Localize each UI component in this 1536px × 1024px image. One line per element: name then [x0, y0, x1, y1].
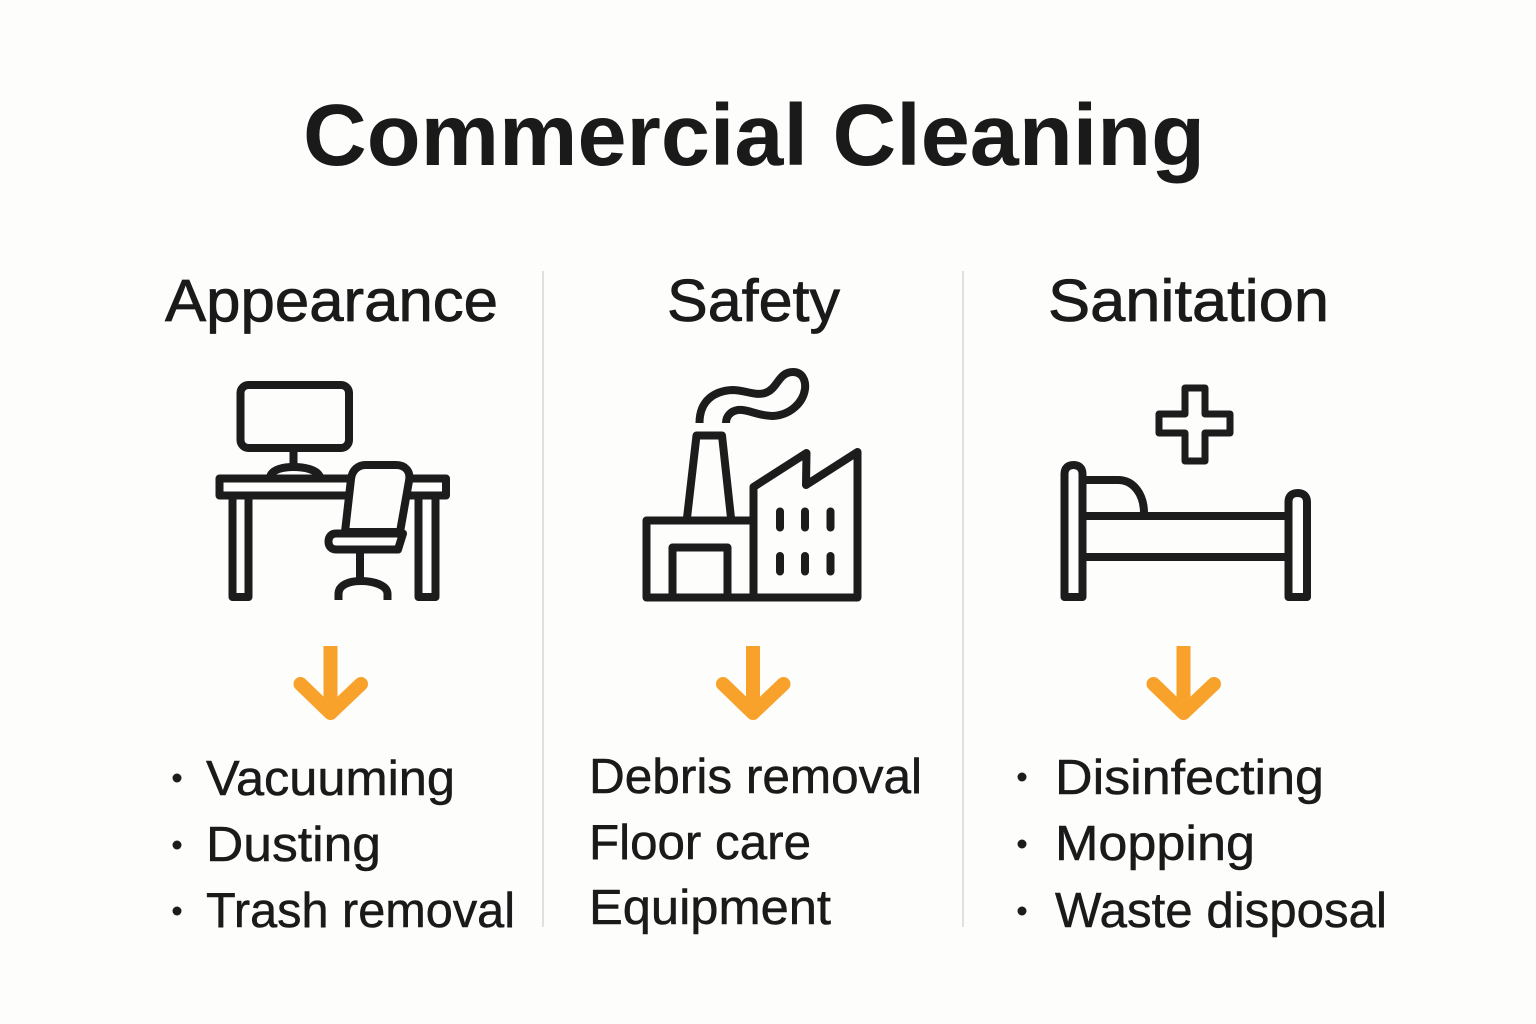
- title: Commercial Cleaning: [303, 87, 1205, 184]
- heading: appearance: Appearance: [165, 268, 498, 334]
- icon: factory with smoking chimney: [646, 372, 858, 598]
- list: sanitation tasks: [1018, 751, 1387, 938]
- panel: safety: [589, 268, 922, 935]
- list: safety tasks: Debris removal: [589, 750, 922, 804]
- panel: appearance: [165, 268, 515, 938]
- list: safety tasks: [589, 750, 922, 935]
- icon: hospital bed with medical cross: [1064, 388, 1307, 597]
- arrow: safety: [723, 646, 784, 713]
- list: appearance tasks: Trash removal: [206, 884, 515, 938]
- list: safety tasks: Floor care: [589, 816, 811, 870]
- panel: sanitation: [1018, 268, 1387, 938]
- list: appearance tasks: [172, 752, 515, 938]
- arrow: appearance: [300, 646, 361, 713]
- list: sanitation tasks: Disinfecting: [1055, 751, 1324, 805]
- list: safety tasks: Equipment: [589, 881, 831, 935]
- list: appearance tasks: Dusting: [206, 818, 381, 872]
- icon: desk with computer and chair: [220, 385, 446, 600]
- list: sanitation tasks: Waste disposal: [1055, 884, 1387, 938]
- heading: safety: Safety: [667, 268, 841, 334]
- arrow: sanitation: [1154, 646, 1214, 713]
- list: appearance tasks: Vacuuming: [206, 752, 455, 806]
- heading: sanitation: Sanitation: [1048, 268, 1329, 334]
- list: sanitation tasks: Mopping: [1055, 817, 1255, 871]
